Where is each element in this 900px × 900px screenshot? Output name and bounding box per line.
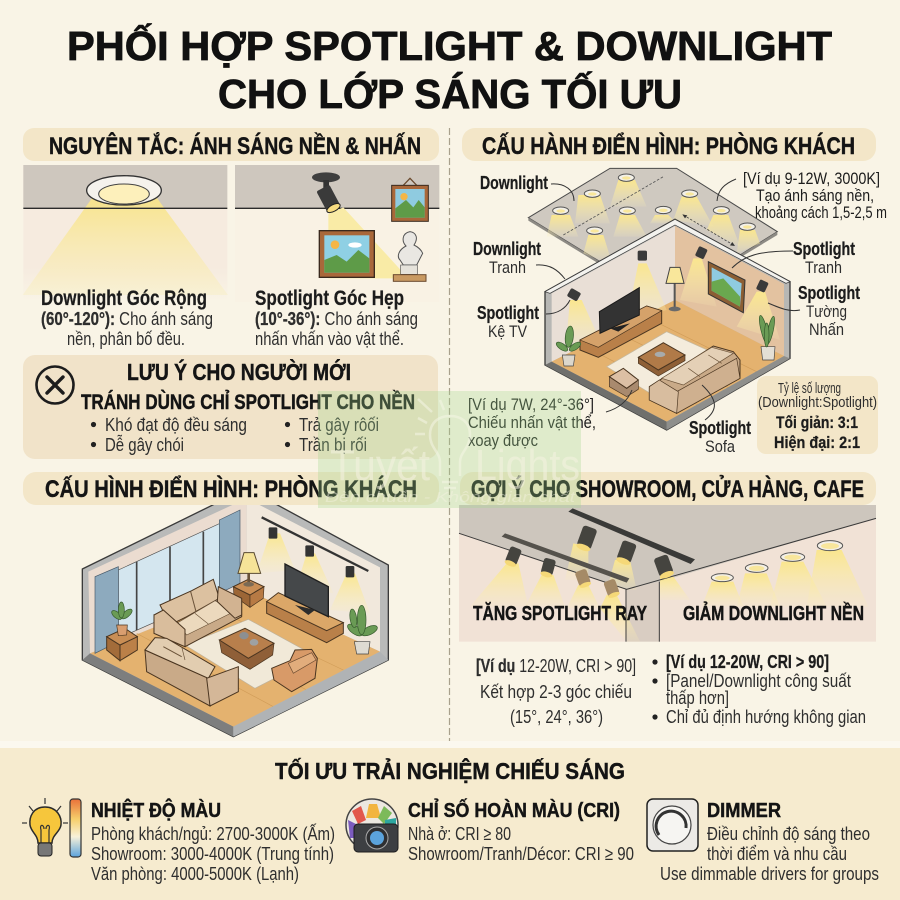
panel: typical configuration with labels xyxy=(462,128,887,456)
illustration: exploded living room xyxy=(528,168,790,430)
heading: principles: NGUYÊN TẮC: ÁNH SÁNG NỀN & NHẤN xyxy=(49,132,421,160)
armchair xyxy=(272,649,317,692)
note: downlight example xyxy=(743,169,887,222)
plants xyxy=(107,637,120,661)
ottoman xyxy=(609,377,638,397)
text: spotlight description: nhấn vhấn vào vật thể. xyxy=(255,328,404,349)
illustration: downlight wide beam xyxy=(23,165,228,302)
illustration: isometric living room xyxy=(82,488,388,737)
note: spotlight example: Chiếu nhấn vật thể, xyxy=(468,413,596,432)
leader lines xyxy=(536,179,800,420)
callout: quantity ratio: Tối giản: 3:1 xyxy=(776,413,858,432)
text: spotlight description: Spotlight Góc Hẹp xyxy=(255,287,404,310)
caution bullets: Trả gây rôối xyxy=(299,414,379,435)
back sofa xyxy=(154,603,242,647)
text: downlight recommendation xyxy=(652,652,866,727)
caution bullets xyxy=(91,414,379,455)
title xyxy=(67,23,832,117)
text: color rendering index: CHỈ SỐ HOÀN MÀU (CRI) xyxy=(408,798,620,822)
note: spotlight example: [Ví dụ 7W, 24°-36°] xyxy=(468,395,594,414)
text: spotlight recommendation xyxy=(476,655,636,727)
note: spotlight example: xoay được xyxy=(468,431,538,450)
footer heading: TỐI ƯU TRẢI NGHIỆM CHIẾU SÁNG xyxy=(275,756,625,784)
spots xyxy=(567,246,769,302)
text: color temperature: Phòng khách/ngủ: 2700-3000K (Ấm) xyxy=(91,823,335,844)
panel: principles xyxy=(23,128,439,349)
label: increase track spotlight: TĂNG SPOTLIGHT RAY xyxy=(473,602,648,625)
text: spotlight recommendation: Kết hợp 2-3 góc chiếu xyxy=(480,681,632,702)
label: downlight painting xyxy=(473,239,541,277)
title: PHỐI HỢP SPOTLIGHT & DOWNLIGHT xyxy=(67,23,832,69)
tv unit xyxy=(580,306,662,357)
note: downlight example: [Ví dụ 9-12W, 3000K] xyxy=(743,169,880,188)
label: spotlight tv shelf xyxy=(477,303,539,341)
icon: x in circle xyxy=(36,366,74,404)
caution bullets: Dễ gây chói xyxy=(105,434,184,455)
watermark xyxy=(318,391,581,508)
label: downlight painting: Downlight xyxy=(473,239,541,259)
label: downlight: Downlight xyxy=(480,173,548,193)
lamp table xyxy=(233,587,250,607)
text: color temperature xyxy=(91,798,335,884)
text: spotlight description xyxy=(255,287,418,349)
caution bullets: Khó đạt độ đều sáng xyxy=(105,414,247,435)
icon: bulb and color temperature scale xyxy=(22,798,81,857)
label: spotlight sofa: Spotlight xyxy=(689,418,751,438)
text: downlight recommendation: [Panel/Downlight công suất xyxy=(666,670,851,691)
illustration: track spotlights and downlights xyxy=(459,505,876,642)
label: spotlight accent wall: Tường xyxy=(806,302,847,321)
text: downlight description xyxy=(41,287,213,349)
callout: quantity ratio: Hiện đại: 2:1 xyxy=(774,433,860,452)
caution subheading: TRÁNH DÙNG CHỈ SPOTLIGHT CHO NỀN xyxy=(81,390,415,414)
label: spotlight painting: Tranh xyxy=(805,258,842,277)
text: downlight recommendation: thấp hơn] xyxy=(666,687,729,708)
illustration: spotlight accent on artwork xyxy=(235,165,439,302)
painting xyxy=(708,262,745,313)
icon: color wheel camera xyxy=(346,799,398,852)
lamp xyxy=(674,283,676,308)
note: downlight example: Tạo ánh sáng nền, xyxy=(756,186,874,205)
sofa xyxy=(649,346,740,413)
watermark: Đèn chuẩn - Không gian chất xyxy=(325,489,576,506)
text: downlight recommendation: [Ví dụ 12-20W, CRI > 90] xyxy=(666,652,829,672)
caution bullets: Trần bị rối xyxy=(299,434,367,455)
text: downlight description: (60°-120°): Cho ánh sáng xyxy=(41,308,213,329)
text: color rendering index: Nhà ở: CRI ≥ 80 xyxy=(408,823,511,844)
heading: principles xyxy=(23,128,439,161)
label: spotlight painting: Spotlight xyxy=(793,239,855,259)
rug xyxy=(185,619,317,688)
plants xyxy=(562,355,575,366)
panel: living room configuration xyxy=(23,472,439,737)
label: downlight painting: Tranh xyxy=(489,258,526,277)
callout: quantity ratio: Tỷ lệ số lượng xyxy=(778,381,841,397)
callout: quantity ratio: (Downlight:Spotlight) xyxy=(758,395,877,411)
label: spotlight accent wall: Nhấn xyxy=(809,320,844,339)
callout: quantity ratio xyxy=(757,376,878,454)
caution heading: LƯU Ý CHO NGƯỜI MỚI xyxy=(127,358,351,385)
rug table xyxy=(607,332,737,403)
wall beams xyxy=(567,300,598,347)
label: spotlight tv shelf: Spotlight xyxy=(477,303,539,323)
track and beams xyxy=(257,533,295,573)
watermark: Tuyết xyxy=(330,441,430,490)
text: downlight description: Downlight Góc Rộng xyxy=(41,287,207,310)
label: spotlight tv shelf: Kệ TV xyxy=(488,322,528,341)
label: spotlight painting xyxy=(793,239,855,277)
note: spotlight example xyxy=(468,395,596,450)
text: dimmer: DIMMER xyxy=(707,800,782,822)
center divider xyxy=(448,128,450,742)
text: color temperature: NHIỆT ĐỘ MÀU xyxy=(91,798,221,822)
panel: optimize lighting experience xyxy=(0,741,900,900)
tv unit xyxy=(267,602,343,643)
text: dimmer xyxy=(660,800,879,884)
label: spotlight sofa xyxy=(689,418,751,456)
text: dimmer: thời điểm và nhu cầu xyxy=(707,843,847,864)
table xyxy=(219,640,274,669)
label: spotlight accent wall xyxy=(798,283,860,339)
heading: living room configuration: CẤU HÌNH ĐIỂN HÌNH: PHÒNG KHÁCH xyxy=(45,475,417,503)
text: spotlight recommendation: (15°, 24°, 36°) xyxy=(510,706,603,727)
text: downlight description: nền, phân bố đều. xyxy=(67,328,185,349)
panel: showroom suggestions xyxy=(459,472,876,727)
text: color rendering index: Showroom/Tranh/Décor: CRI ≥ 90 xyxy=(408,843,634,864)
text: color rendering index xyxy=(408,798,634,864)
text: color temperature: Showroom: 3000-4000K (Trung tính) xyxy=(91,843,334,864)
room shell xyxy=(545,219,790,430)
label: spotlight sofa: Sofa xyxy=(705,437,735,456)
front sofa xyxy=(145,650,210,706)
watermark: Lights xyxy=(475,441,580,490)
text: spotlight description: (10°-36°): Cho ánh sáng xyxy=(255,308,418,329)
title: CHO LỚP SÁNG TỐI ƯU xyxy=(218,71,682,117)
text: spotlight recommendation: [Ví dụ 12-20W, CRI > 90] xyxy=(476,655,636,676)
text: color temperature: Văn phòng: 4000-5000K (Lạnh) xyxy=(91,863,299,884)
panel: beginner caution xyxy=(23,355,438,459)
icon: dimmer switch xyxy=(647,799,698,851)
label: spotlight accent wall: Spotlight xyxy=(798,283,860,303)
